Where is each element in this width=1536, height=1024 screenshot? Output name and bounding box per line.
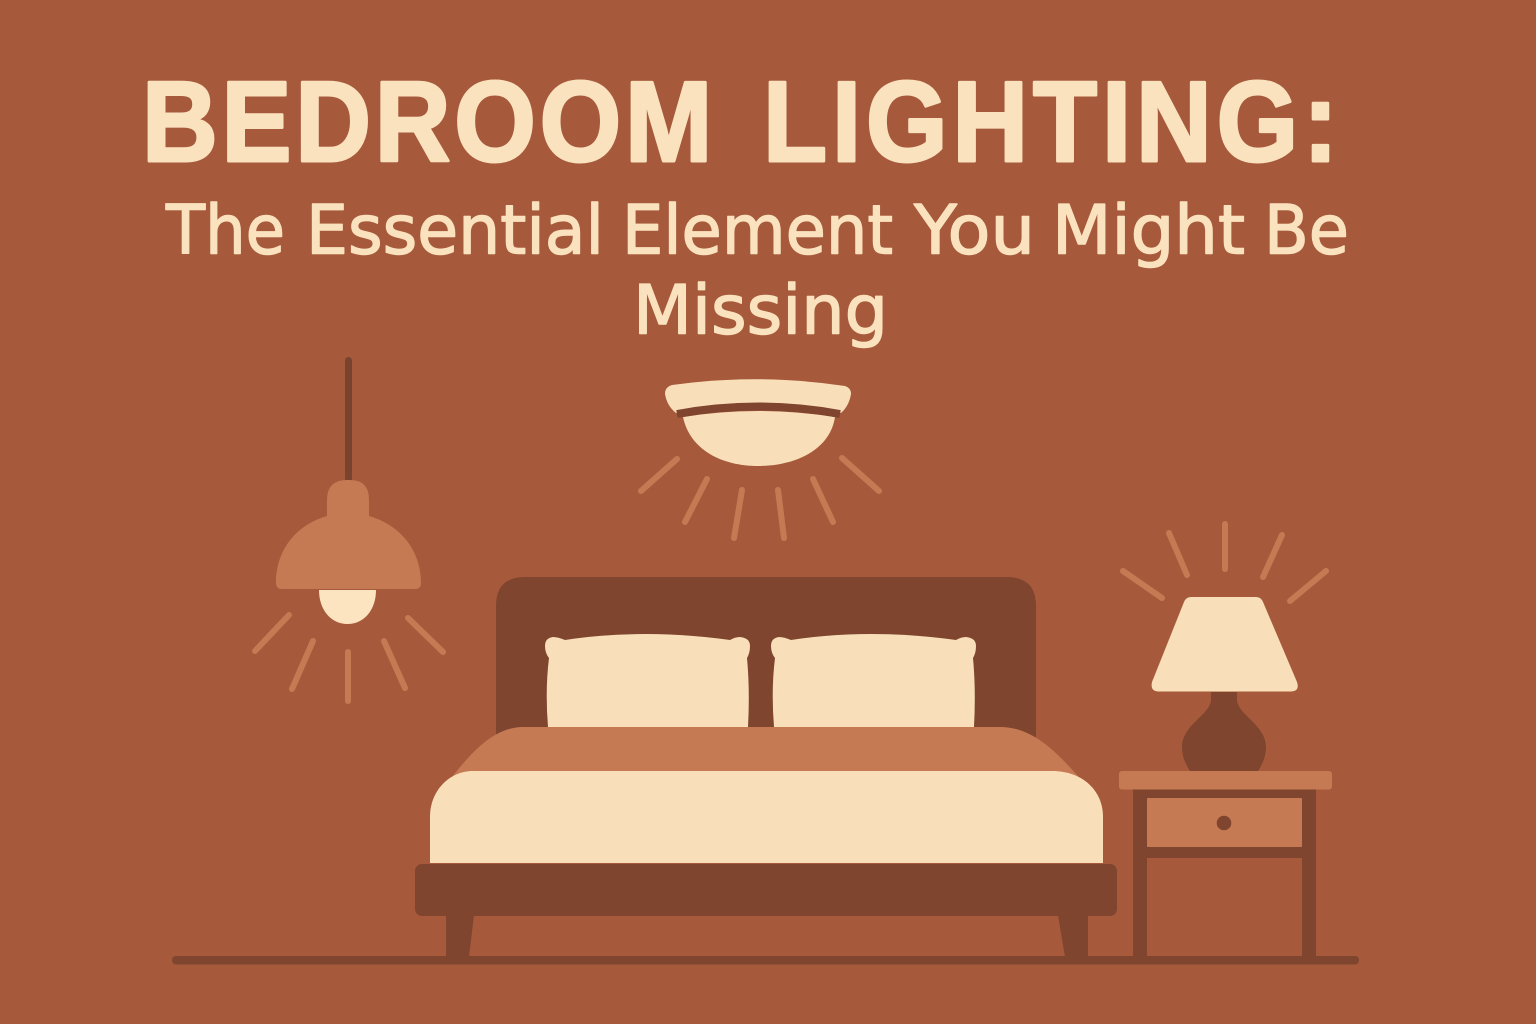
subtitle: Essential: [306, 192, 604, 270]
icon: ceiling light: [641, 379, 879, 538]
blanket: [442, 727, 1090, 790]
floor line: [172, 956, 1359, 964]
subtitle: Might: [1052, 192, 1245, 270]
subtitle: You: [913, 192, 1035, 270]
bed frame: [415, 864, 1117, 916]
bed legs: [446, 915, 1088, 957]
title: BEDROOM: [142, 59, 712, 186]
icon: table lamp: [1123, 524, 1326, 771]
title: [142, 59, 1338, 186]
subtitle: [165, 192, 1349, 350]
mattress: [430, 771, 1103, 863]
headboard: [496, 577, 1036, 740]
subtitle: Missing: [633, 272, 888, 350]
subtitle: The: [165, 192, 285, 270]
pillow right: [771, 634, 976, 727]
icon: pendant lamp: [255, 357, 443, 701]
subtitle: Be: [1264, 192, 1349, 270]
title: LIGHTING:: [763, 59, 1338, 186]
icon: bed: [415, 577, 1117, 957]
subtitle: Element: [622, 192, 893, 270]
drawer: [1147, 798, 1302, 847]
pillow left: [545, 634, 750, 727]
drawer knob: [1217, 816, 1231, 830]
icon: nightstand: [1119, 771, 1332, 957]
